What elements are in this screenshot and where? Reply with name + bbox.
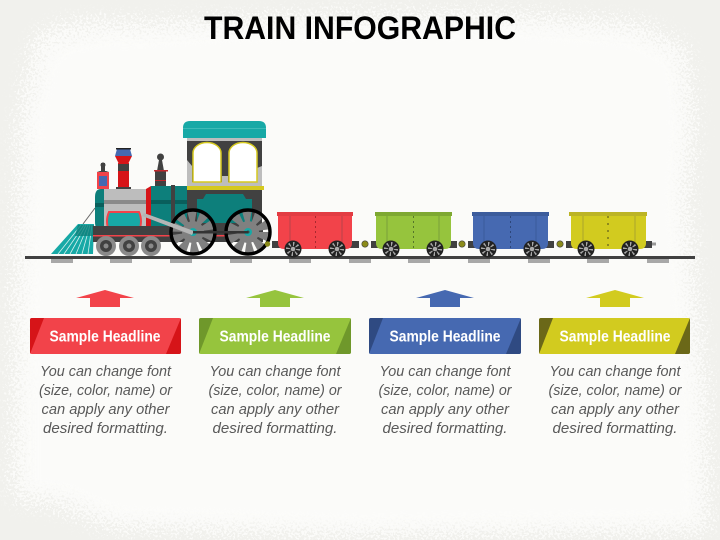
body text: can apply any other	[551, 401, 680, 418]
chassis	[93, 226, 263, 242]
body text	[548, 363, 682, 437]
body text	[208, 363, 342, 437]
body text: can apply any other	[211, 401, 340, 418]
body text: You can change font	[550, 363, 681, 380]
arrow	[586, 290, 644, 307]
wheels	[578, 240, 638, 258]
panel: yellow	[539, 290, 690, 437]
connecting rods	[142, 213, 270, 247]
coupler	[557, 241, 563, 247]
cab windows	[193, 142, 257, 182]
headline banner: Sample Headline	[220, 328, 331, 346]
headline banner	[30, 318, 181, 354]
cowcatcher	[51, 208, 95, 254]
body text: desired formatting.	[552, 420, 678, 437]
headline banner: Sample Headline	[390, 328, 501, 346]
body text: (size, color, name) or	[39, 382, 173, 399]
arrow	[246, 290, 304, 307]
headline banner: Sample Headline	[50, 328, 161, 346]
small wheels	[96, 236, 161, 256]
locomotive	[51, 121, 270, 256]
smokestack	[115, 148, 132, 189]
body text: desired formatting.	[212, 420, 338, 437]
body text: (size, color, name) or	[208, 382, 342, 399]
wheels	[382, 240, 444, 258]
boiler	[95, 185, 187, 231]
wheels	[480, 240, 540, 258]
body text: can apply any other	[381, 401, 510, 418]
large wheel rear	[226, 210, 270, 254]
body text: You can change font	[40, 363, 172, 380]
lantern	[97, 162, 109, 189]
headline banner: Sample Headline	[560, 328, 671, 346]
body text	[39, 363, 173, 437]
panel: blue	[369, 290, 521, 437]
arrow	[76, 290, 134, 307]
body text: can apply any other	[42, 401, 170, 418]
body text: desired formatting.	[43, 420, 168, 437]
cab roof	[183, 121, 266, 138]
panel: green	[199, 290, 351, 437]
headline banner	[369, 318, 521, 354]
body text	[378, 363, 512, 437]
panel: red	[30, 290, 181, 437]
body text: desired formatting.	[382, 420, 508, 437]
coupler	[362, 241, 368, 247]
headline banner	[199, 318, 351, 354]
wagon: green	[371, 212, 457, 258]
title: TRAIN INFOGRAPHIC	[204, 10, 516, 46]
steam dome	[154, 154, 168, 186]
large wheel front	[171, 210, 215, 254]
arrow	[416, 290, 474, 307]
headline banner	[539, 318, 690, 354]
coupler	[459, 241, 465, 247]
wagon: yellow	[566, 212, 656, 258]
body text: (size, color, name) or	[548, 382, 682, 399]
body text: You can change font	[380, 363, 511, 380]
body text: (size, color, name) or	[378, 382, 512, 399]
wheels	[284, 240, 346, 258]
body text: You can change font	[210, 363, 341, 380]
wagon: red	[272, 212, 359, 258]
wagon: blue	[468, 212, 554, 258]
cab	[183, 121, 266, 230]
railway track	[25, 256, 695, 263]
